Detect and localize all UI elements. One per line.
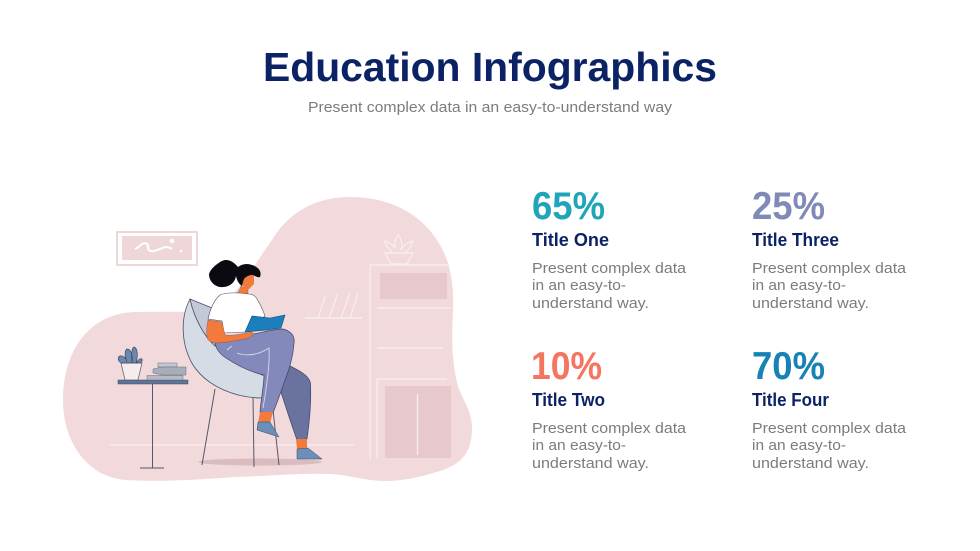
stat: 10% Title Two: 10% [531,345,602,388]
stat: 65% Title One: in an easy-to- [532,277,626,294]
arm [207,320,254,343]
stat: 10% Title Two: in an easy-to- [532,437,626,454]
stat: 25% Title Three: Title Three [752,230,839,250]
stat: 25% Title Three: 25% [752,185,825,228]
back foot [296,439,322,459]
stat: 10% Title Two [531,345,687,472]
side table with plant and books [118,347,188,468]
room line art [110,235,451,459]
stat: 10% Title Two: understand way. [532,455,649,472]
stat: 65% Title One: Title One [532,230,609,250]
stat: 70% Title Four: Title Four [752,390,829,410]
background blob [63,197,472,481]
chair inner back [190,299,224,346]
chair legs [202,389,279,467]
stat: 70% Title Four: 70% [752,345,825,388]
stat: 25% Title Three: in an easy-to- [752,277,846,294]
title: Education Infographics [263,44,717,90]
illustration: woman reading in room [63,197,472,481]
book [245,315,285,332]
torso white shirt [208,293,265,333]
stat: 25% Title Three [752,185,907,312]
wall picture [117,232,197,265]
front leg [215,329,294,413]
front foot [257,412,279,437]
stat: 25% Title Three: Present complex data [752,260,907,277]
face [240,274,254,290]
stat: 65% Title One: understand way. [532,295,649,312]
stat: 65% Title One [532,185,687,312]
stat: 70% Title Four: understand way. [752,455,869,472]
back leg [281,365,311,440]
stat: 10% Title Two: Present complex data [532,420,687,437]
cabinet panels [380,273,447,299]
subtitle: Present complex data in an easy-to-understand way [308,99,673,116]
hair [209,260,261,287]
chair [183,299,270,398]
floor shadow [198,458,322,466]
stat: 70% Title Four [752,345,907,472]
stat: 25% Title Three: understand way. [752,295,869,312]
neck [238,286,248,295]
stat: 70% Title Four: Present complex data [752,420,907,437]
stat: 65% Title One: 65% [532,185,605,228]
stat: 70% Title Four: in an easy-to- [752,437,846,454]
under-thigh shadow [245,363,264,376]
stat: 65% Title One: Present complex data [532,260,687,277]
stat: 10% Title Two: Title Two [532,390,605,410]
